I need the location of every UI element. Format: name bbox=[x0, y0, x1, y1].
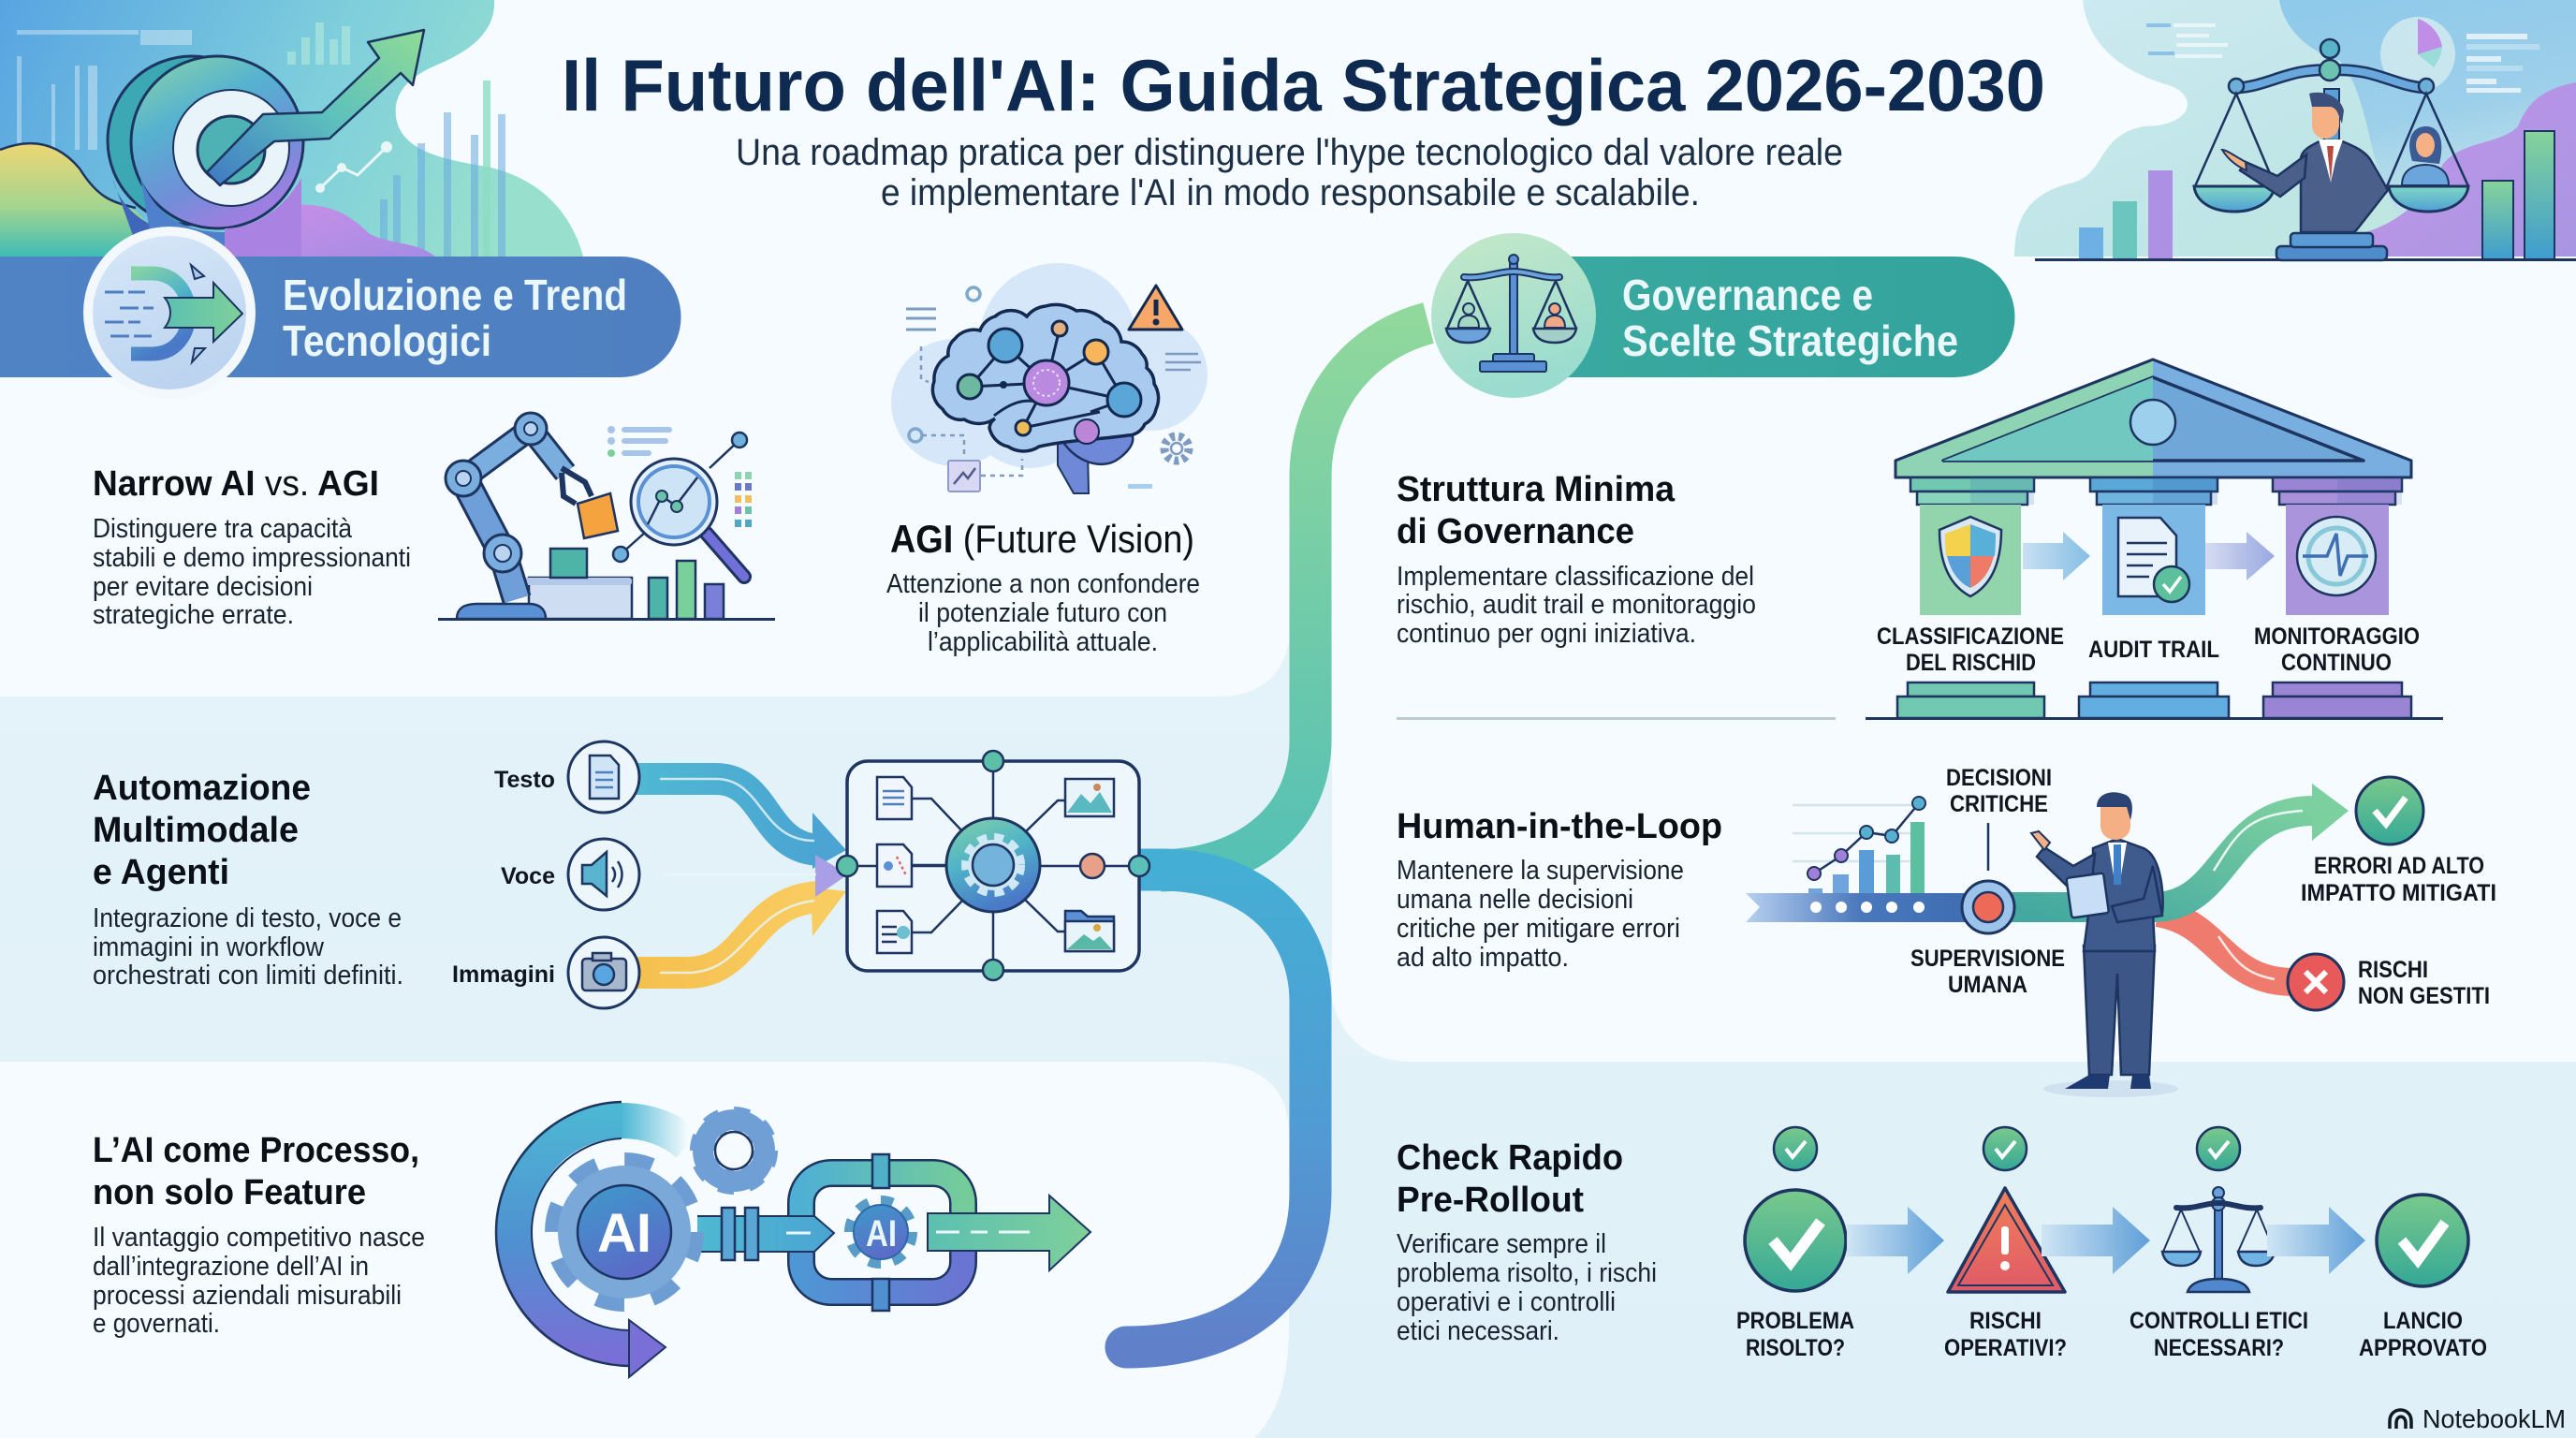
chart: decision flow bbox=[1746, 765, 2496, 1010]
subtitle: e implementare l'AI in modo responsabile e scalabile. bbox=[881, 172, 1700, 213]
label: Voce: Voce bbox=[501, 863, 555, 889]
text block bbox=[1397, 1229, 1657, 1346]
label: Testo: Testo bbox=[494, 767, 555, 793]
gear: small AI bbox=[852, 1203, 910, 1261]
text block bbox=[93, 514, 411, 630]
connector: blue river bbox=[1126, 870, 1310, 1347]
heading: Human-in-the-Loop bbox=[1397, 807, 1722, 846]
illustration: growth arrow top left bbox=[0, 0, 583, 257]
text block: e governati. bbox=[93, 1309, 220, 1339]
panel: L'AI come Processo bbox=[93, 1102, 1090, 1377]
arrow: output bbox=[928, 1196, 1090, 1270]
text block: Attenzione a non confondere bbox=[886, 569, 1200, 599]
heading bbox=[93, 769, 311, 892]
text block: etici necessari. bbox=[1397, 1316, 1559, 1346]
column: monitoraggio bbox=[2273, 477, 2402, 615]
text block: Il vantaggio competitivo nasce bbox=[93, 1223, 425, 1253]
gear: small top bbox=[703, 1120, 765, 1181]
icon: governance temple bbox=[1866, 360, 2443, 720]
text block: l’applicabilità attuale. bbox=[928, 627, 1158, 657]
text block: problema risolto, i rischi bbox=[1397, 1258, 1657, 1288]
text block: continuo per ogni iniziativa. bbox=[1397, 619, 1696, 649]
text block: orchestrati con limiti definiti. bbox=[93, 961, 403, 990]
labels: CRITICHE bbox=[1950, 791, 2048, 817]
heading: e Agenti bbox=[93, 853, 229, 892]
heading: non solo Feature bbox=[93, 1173, 366, 1212]
labels: DEL RISCHID bbox=[1906, 650, 2036, 676]
icon: check outcome bbox=[2356, 777, 2423, 844]
icon: document bbox=[568, 741, 639, 813]
text block: strategiche errate. bbox=[93, 600, 294, 630]
panel: AGI Future Vision bbox=[886, 263, 1208, 657]
panel: Struttura Minima di Governance bbox=[1397, 360, 2443, 720]
text block: rischio, audit trail e monitoraggio bbox=[1397, 590, 1756, 620]
heading: Multimodale bbox=[93, 811, 299, 850]
arrow: audit to monitoraggio bbox=[2205, 532, 2275, 580]
illustration: businessman and scale top right bbox=[2014, 0, 2576, 261]
text block: immagini in workflow bbox=[93, 932, 325, 962]
heading bbox=[1397, 470, 1676, 551]
heading bbox=[93, 1131, 419, 1212]
icon: problem solved bbox=[1745, 1190, 1846, 1291]
icon: camera bbox=[568, 937, 639, 1008]
labels: APPROVATO bbox=[2359, 1335, 2487, 1361]
panel: Narrow AI vs AGI bbox=[93, 413, 775, 630]
labels: DECISIONI bbox=[1946, 765, 2052, 791]
icon: section arrow bbox=[83, 227, 256, 399]
icon: robot arm and magnifier bbox=[438, 413, 775, 621]
labels bbox=[1877, 624, 2420, 676]
icon: AI process pipeline bbox=[496, 1102, 1090, 1377]
subtitle: Una roadmap pratica per distinguere l'hype tecnologico dal valore reale bbox=[736, 132, 1843, 173]
section banner: Evoluzione e Trend Tecnologici: Evoluzione e Trend bbox=[283, 271, 627, 319]
figure: supervising businessman bbox=[2031, 792, 2178, 1097]
icon: brain network bbox=[891, 263, 1208, 493]
labels: LANCIO bbox=[2383, 1308, 2463, 1334]
labels: RISCHI bbox=[1969, 1308, 2042, 1334]
labels: NECESSARI? bbox=[2154, 1335, 2284, 1361]
column bases bbox=[1897, 682, 2411, 718]
icon: ethics scale bbox=[2162, 1187, 2275, 1292]
labels: SUPERVISIONE bbox=[1910, 946, 2065, 972]
section banner: Evoluzione e Trend Tecnologici: Tecnologici bbox=[283, 316, 491, 365]
section banner: Evoluzione e Trend Tecnologici bbox=[0, 227, 681, 399]
text block: Distinguere tra capacità bbox=[93, 514, 353, 544]
section banner: Governance e Scelte Strategiche: Scelte Strategiche bbox=[1622, 316, 1958, 365]
panel: Human-in-the-Loop bbox=[1397, 765, 2496, 1097]
pipeline loop bbox=[801, 1154, 963, 1311]
column: audit trail bbox=[2090, 477, 2217, 615]
labels: ERRORI AD ALTO bbox=[2314, 853, 2484, 879]
subtitle bbox=[736, 132, 1843, 213]
labels: CONTROLLI ETICI bbox=[2130, 1308, 2308, 1334]
gear: large AI bbox=[560, 1167, 689, 1297]
text block: processi aziendali misurabili bbox=[93, 1281, 402, 1311]
text block bbox=[886, 569, 1200, 657]
checklist: small checks bbox=[1774, 1127, 2240, 1170]
text block: Mantenere la supervisione bbox=[1397, 856, 1684, 886]
text block bbox=[1397, 856, 1684, 973]
icon: speaker bbox=[568, 839, 639, 910]
title: Il Futuro dell'AI: Guida Strategica 2026-2030 bbox=[562, 44, 2045, 126]
heading: di Governance bbox=[1397, 512, 1634, 551]
heading: Struttura Minima bbox=[1397, 470, 1676, 509]
labels: PROBLEMA bbox=[1736, 1308, 1854, 1334]
labels bbox=[1736, 1308, 2487, 1361]
heading: AGI (Future Vision) bbox=[890, 517, 1194, 561]
text block: ad alto impatto. bbox=[1397, 943, 1569, 973]
labels: IMPATTO MITIGATI bbox=[2301, 880, 2496, 906]
labels: UMANA bbox=[1948, 972, 2027, 998]
text block: Integrazione di testo, voce e bbox=[93, 903, 402, 933]
background bands bbox=[0, 642, 2576, 1438]
labels: CLASSIFICAZIONE bbox=[1877, 624, 2064, 650]
labels bbox=[1910, 765, 2496, 1009]
text block bbox=[93, 1223, 425, 1339]
heading: Automazione bbox=[93, 769, 311, 808]
column: classificazione bbox=[1910, 477, 2034, 615]
heading: Check Rapido bbox=[1397, 1138, 1623, 1178]
arrow: step 3 bbox=[2267, 1207, 2365, 1274]
text block: operativi e i controlli bbox=[1397, 1287, 1616, 1317]
gear: large AI: AI bbox=[597, 1203, 651, 1264]
section banner: Governance e Scelte Strategiche bbox=[1431, 233, 2014, 398]
panel: Automazione Multimodale e Agenti bbox=[93, 741, 1149, 1008]
labels: RISCHI bbox=[2358, 957, 2428, 983]
icon: orchestrator hub bbox=[837, 751, 1149, 980]
labels: OPERATIVI? bbox=[1944, 1335, 2067, 1361]
logo: NotebookLM: NotebookLM bbox=[2422, 1404, 2566, 1433]
heading: L’AI come Processo, bbox=[93, 1131, 419, 1170]
icon: scale with people bbox=[1431, 233, 1596, 398]
arrow: step 1 bbox=[1847, 1207, 1944, 1274]
labels: AUDIT TRAIL bbox=[2088, 637, 2219, 663]
text block: umana nelle decisioni bbox=[1397, 885, 1633, 915]
text block: dall’integrazione dell’AI in bbox=[93, 1252, 369, 1282]
heading: Pre-Rollout bbox=[1397, 1181, 1584, 1220]
text block: il potenziale futuro con bbox=[918, 598, 1167, 628]
gear: small AI: AI bbox=[866, 1213, 897, 1255]
text block: stabili e demo impressionanti bbox=[93, 543, 411, 573]
icon: warning bbox=[1948, 1188, 2065, 1292]
labels: RISOLTO? bbox=[1746, 1335, 1845, 1361]
icon: launch approved bbox=[2377, 1195, 2468, 1286]
label: Immagini: Immagini bbox=[452, 961, 555, 988]
heading bbox=[1397, 1138, 1623, 1220]
icon: risk outcome bbox=[2288, 954, 2344, 1010]
chart: multimodal flows bbox=[452, 741, 1149, 1008]
labels: CONTINUO bbox=[2281, 650, 2392, 676]
text block bbox=[1397, 562, 1756, 649]
labels: NON GESTITI bbox=[2358, 983, 2490, 1009]
text block: Implementare classificazione del bbox=[1397, 562, 1754, 592]
panel: Check Rapido Pre-Rollout bbox=[1397, 1127, 2487, 1361]
text block: per evitare decisioni bbox=[93, 572, 313, 602]
section banner: Governance e Scelte Strategiche: Governance e bbox=[1622, 271, 1873, 319]
arrow: classificazione to audit bbox=[2023, 532, 2090, 580]
labels: MONITORAGGIO bbox=[2254, 624, 2420, 650]
text block: critiche per mitigare errori bbox=[1397, 914, 1680, 944]
text block bbox=[93, 903, 403, 990]
connector: green river bbox=[1161, 323, 1428, 871]
arrow: step 2 bbox=[2042, 1207, 2150, 1274]
heading: Narrow AI vs. AGI bbox=[93, 464, 379, 504]
text block: Verificare sempre il bbox=[1397, 1229, 1606, 1259]
